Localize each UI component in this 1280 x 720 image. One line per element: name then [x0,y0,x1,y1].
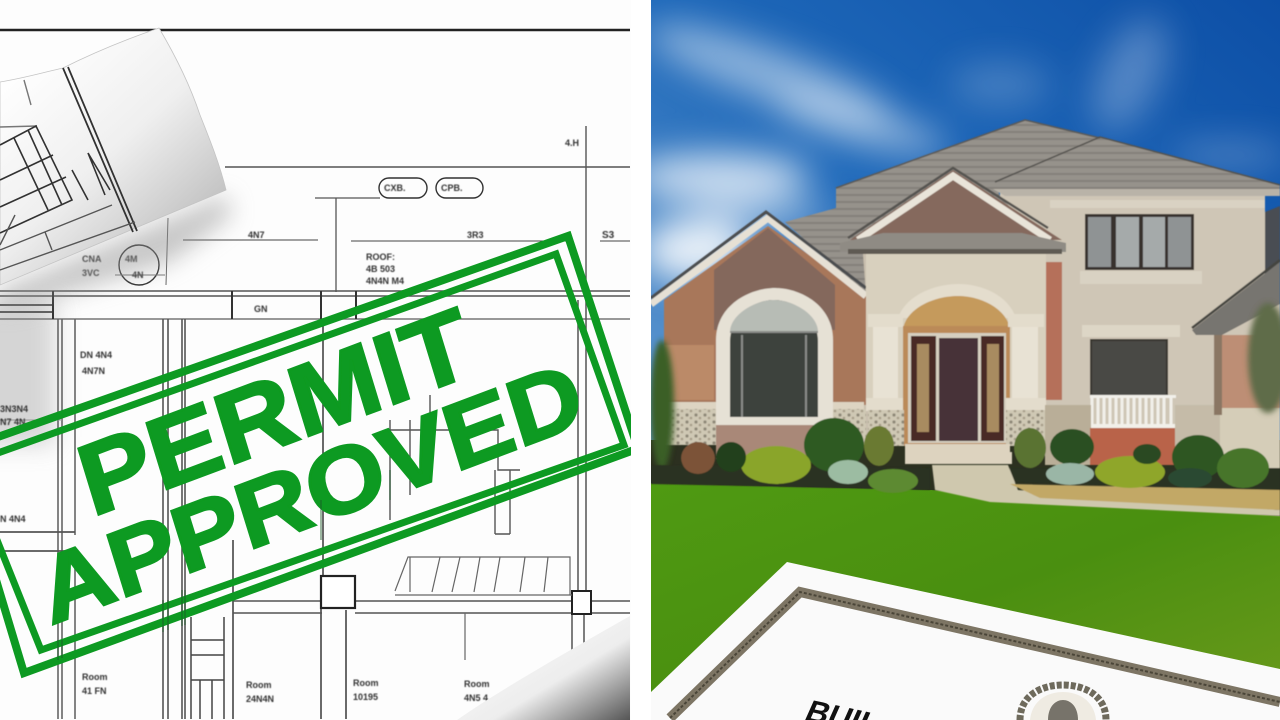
blueprint annotations: CXB. [384,183,406,193]
main roof [785,120,1280,295]
stamp word approved: APPROVED [26,341,595,644]
sky [651,0,1280,440]
tree right [1248,303,1280,413]
stamp word permit: PERMIT [66,287,484,538]
far porch side wall [1046,262,1062,400]
stamp inner border [0,254,624,650]
left gable trim [651,218,866,304]
blueprint annotations: 4B 503 [366,264,395,274]
certificate paper [650,562,1280,720]
porch arch [898,284,1016,446]
blueprint annotations: GN [254,304,268,314]
porch columns [866,314,1046,446]
house backdrop wall [664,250,1280,445]
blueprint annotations: 24N4N [246,694,274,704]
panel: finished house [630,0,1280,720]
building permit certificate [650,562,1280,720]
blueprint annotations: 4N7 [248,230,265,240]
blueprint annotations: Room [246,680,272,690]
clouds [630,6,1280,282]
blueprint annotations: 4N4N M4 [366,276,404,286]
blueprint annotations [0,138,615,704]
rolled blueprint sheet [0,28,232,310]
upper window [1080,214,1202,284]
stone base left [664,402,864,410]
walkway [932,465,1280,516]
blueprint annotations: Room [464,679,490,689]
blueprint annotations: DN 4N4 [80,350,112,360]
steps [905,444,1012,464]
lower right base [1045,405,1091,465]
certificate ornate border [670,592,1280,718]
panel: approved blueprint [0,0,645,720]
porch wall [866,250,1046,410]
blueprint annotations: 3R3 [467,230,484,240]
left wing wall [664,226,866,405]
blueprint annotations: Room [353,678,378,688]
shading at left edge of the plan [0,300,55,445]
blueprint annotations: 3N3N4 [0,404,28,414]
blueprint annotations: N 4N4 [0,514,26,524]
blueprint annotations: S3 [602,230,615,241]
curled sheet corner [457,616,630,720]
sketch on the roll [0,67,137,270]
front door [908,333,1006,443]
blueprint annotations: 4M [125,254,138,264]
blueprint annotations: 4N7N [82,366,105,376]
dark planting band behind lawn edge [651,440,1280,516]
blueprint annotations: Room [82,672,108,682]
roll shadow [0,195,232,310]
upper storey wall [999,192,1266,323]
far right roof section [1265,206,1280,275]
plan lines showing through the stamp [58,470,390,660]
house [650,120,1280,516]
porch gable [840,168,1066,254]
shrub left [650,340,674,470]
bushes [681,418,1269,493]
right wing [1192,260,1280,468]
blueprint annotations: 10195 [353,692,378,702]
certificate seal [1020,685,1106,720]
arched window [716,288,833,425]
blueprint annotations: 4.H [565,138,579,148]
stamp: permit approved [0,236,645,673]
lawn [651,483,1280,692]
blueprint annotations: ROOF: [366,252,395,262]
blueprint annotations: 4N5 4 [464,693,488,703]
floor plan linework [0,30,630,719]
blueprint annotations: N7 4N [0,417,26,427]
gravel bed [1010,484,1280,510]
roll sheet [0,28,226,285]
blueprint annotations: CPB. [441,183,463,193]
lower window and railing [1082,325,1180,428]
blueprint annotations: CNA [82,254,102,264]
stamp outer border [0,236,645,673]
blueprint annotations: 4N [132,270,144,280]
blueprint annotations: 41 FN [82,686,107,696]
mulch strip [651,465,930,490]
blueprint annotations: 3VC [82,268,100,278]
